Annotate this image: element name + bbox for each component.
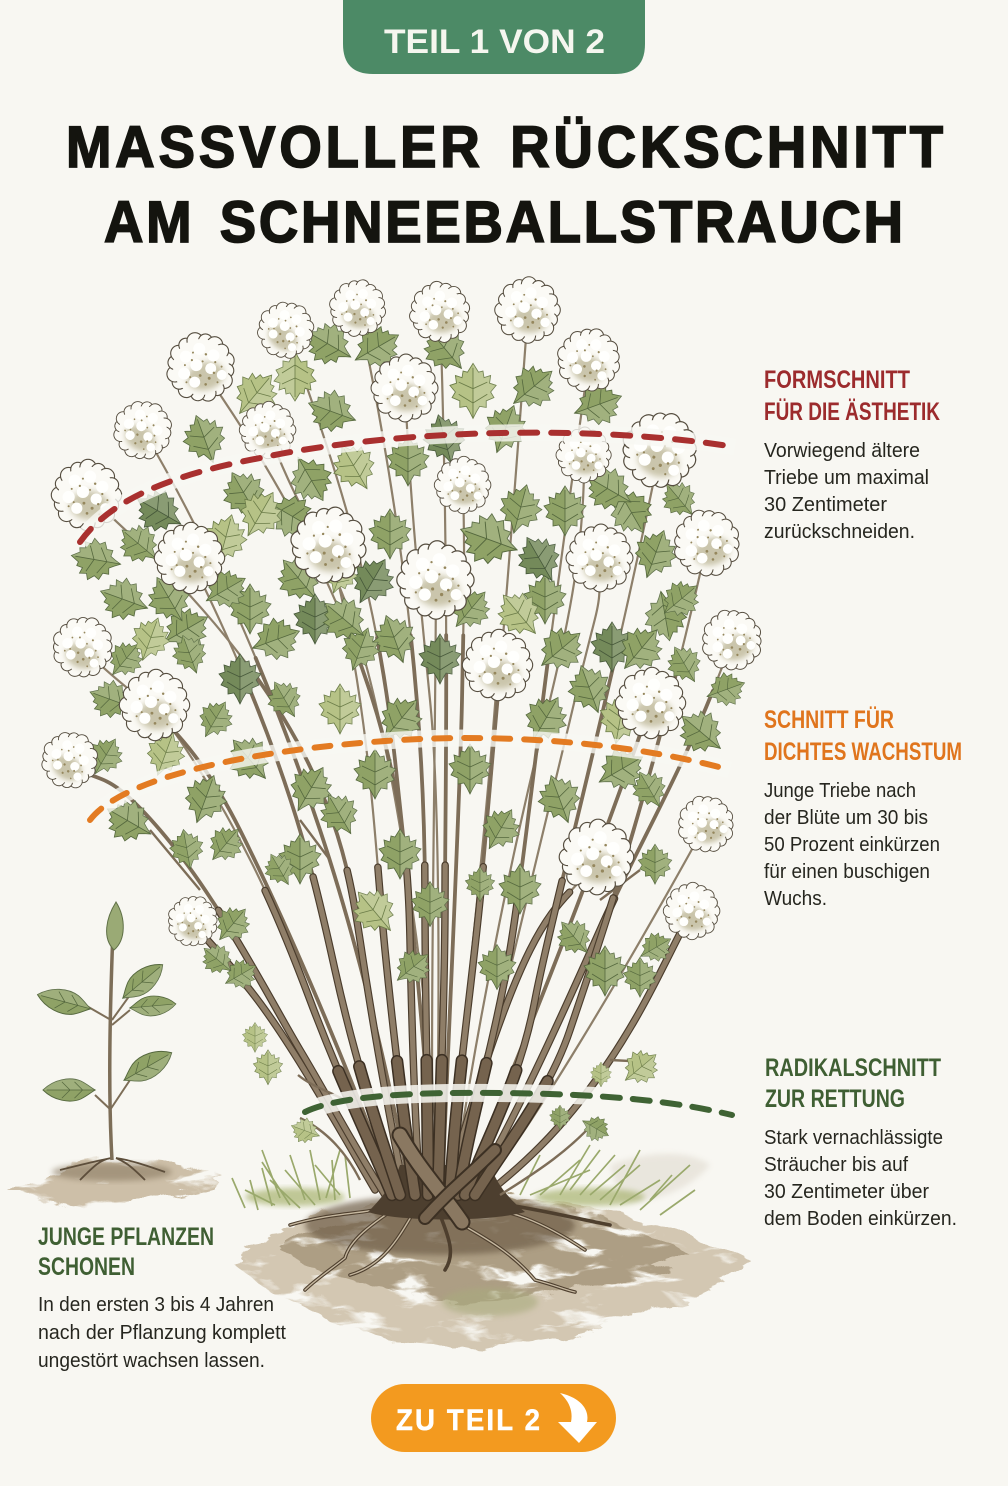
icon: curved arrow <box>558 1393 597 1443</box>
callout: Radikalschnitt: Sträucher bis auf <box>764 1154 908 1176</box>
callout: Schnitt für dichtes Wachstum: für einen buschigen <box>764 861 930 883</box>
illustration: soil and roots <box>232 1145 752 1346</box>
callout: Schnitt für dichtes Wachstum: 50 Prozent einkürzen <box>764 834 940 856</box>
callout: Schnitt für dichtes Wachstum: SCHNITT FÜR <box>764 705 894 734</box>
callout: Junge Pflanzen schonen <box>38 1223 286 1372</box>
cut line: orange <box>90 738 730 820</box>
callout: Schnitt für dichtes Wachstum <box>764 705 962 910</box>
callout: Junge Pflanzen schonen: In den ersten 3 bis 4 Jahren <box>38 1294 274 1316</box>
callout: Junge Pflanzen schonen: nach der Pflanzung komplett <box>38 1322 286 1344</box>
callout: Formschnitt: Triebe um maximal <box>764 467 929 489</box>
callout: Junge Pflanzen schonen: ungestört wachsen lassen. <box>38 1350 265 1372</box>
part label pill: TEIL 1 VON 2 <box>384 23 605 61</box>
callout: Schnitt für dichtes Wachstum: Wuchs. <box>764 888 827 910</box>
callout: Formschnitt: zurückschneiden. <box>764 521 915 543</box>
callout: Formschnitt: 30 Zentimeter <box>764 494 887 516</box>
callout: Radikalschnitt: RADIKALSCHNITT <box>765 1054 941 1082</box>
callout: Schnitt für dichtes Wachstum: Junge Triebe nach <box>764 780 916 802</box>
part label pill <box>343 0 645 74</box>
callout: Formschnitt: Vorwiegend ältere <box>764 440 920 462</box>
title: MASSVOLLER RÜCKSCHNITT <box>66 114 943 179</box>
callout: Radikalschnitt: dem Boden einkürzen. <box>764 1208 957 1230</box>
title: AM SCHNEEBALLSTRAUCH <box>104 189 903 254</box>
young plant illustration <box>12 902 225 1207</box>
callout: Radikalschnitt: 30 Zentimeter über <box>764 1181 929 1203</box>
illustration: flower clusters <box>31 275 771 953</box>
callout: Radikalschnitt: Stark vernachlässigte <box>764 1127 943 1149</box>
callout: Schnitt für dichtes Wachstum: der Blüte um 30 bis <box>764 807 928 829</box>
callout: Junge Pflanzen schonen: JUNGE PFLANZEN <box>38 1223 214 1251</box>
grass <box>232 1145 695 1215</box>
title <box>66 114 943 254</box>
button: zu Teil 2 <box>371 1384 616 1452</box>
illustration: leaves <box>68 314 750 1148</box>
cut line: green <box>305 1093 732 1115</box>
illustration: branches <box>70 308 732 1222</box>
callout: Formschnitt: FÜR DIE ÄSTHETIK <box>764 397 940 426</box>
roots <box>290 1200 610 1292</box>
cut line: red <box>80 433 735 542</box>
callout: Radikalschnitt: ZUR RETTUNG <box>765 1085 905 1113</box>
callout: Radikalschnitt <box>764 1054 957 1230</box>
button: zu Teil 2: ZU TEIL 2 <box>396 1404 540 1437</box>
crossing trunks at the base <box>400 1135 495 1222</box>
callout: Junge Pflanzen schonen: SCHONEN <box>38 1253 135 1281</box>
callout: Formschnitt <box>764 366 940 543</box>
callout: Formschnitt: FORMSCHNITT <box>764 366 910 394</box>
